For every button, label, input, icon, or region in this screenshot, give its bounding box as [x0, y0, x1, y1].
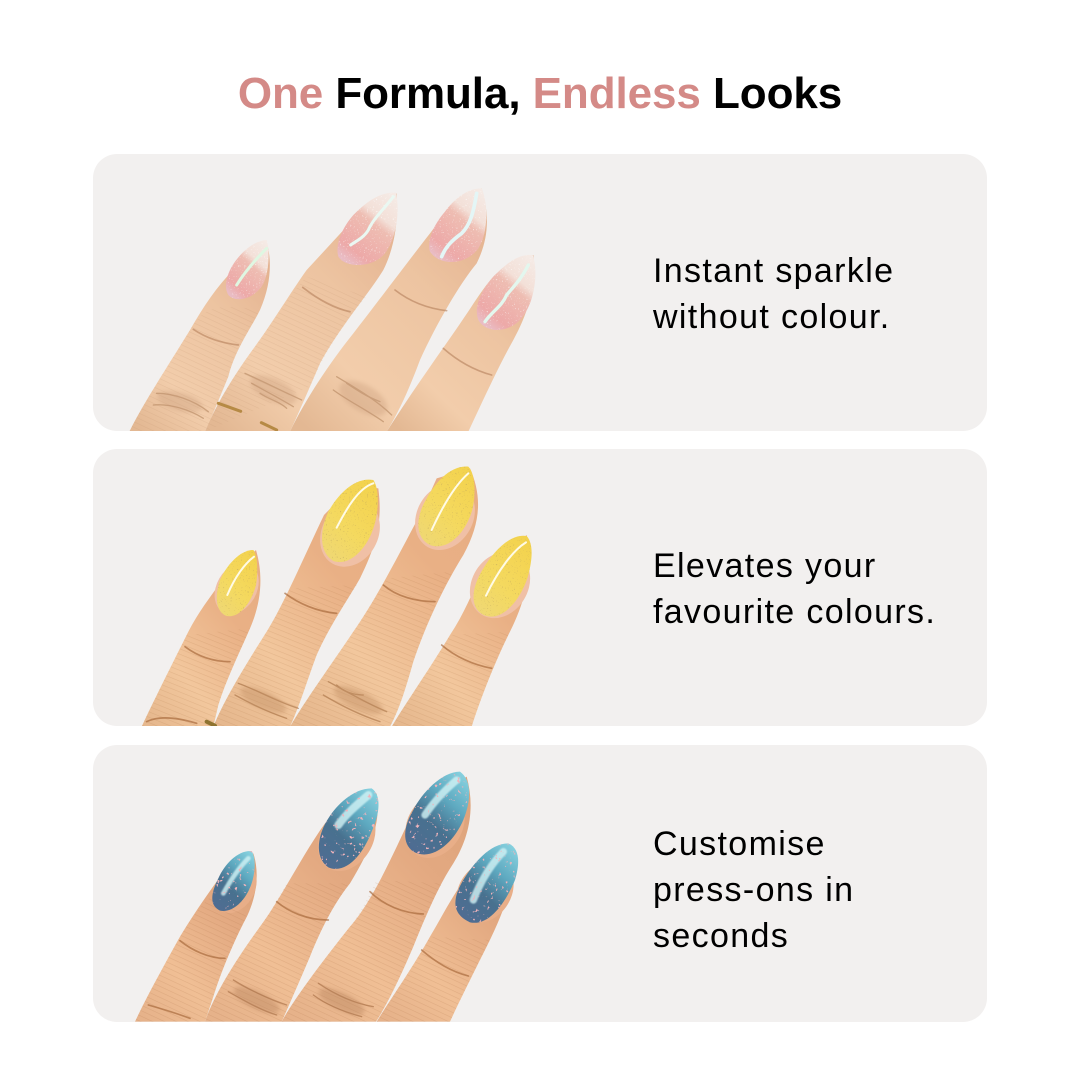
nail fold skin [204, 781, 525, 934]
caption: Customise [653, 825, 826, 863]
middle finger [213, 485, 380, 727]
caption: favourite colours. [653, 593, 936, 631]
ring finger [282, 777, 471, 1022]
pinky finger [135, 853, 257, 1022]
shimmer specks [217, 467, 532, 617]
title: One Formula, Endless Looks [238, 69, 842, 118]
fine skin wrinkles [135, 880, 490, 1022]
photo: hand with yellow shimmer nails [142, 466, 532, 726]
caption [653, 547, 936, 631]
pink flakes [212, 772, 518, 923]
index finger [392, 535, 529, 727]
pink mottling and sparkle [226, 188, 535, 330]
fine skin wrinkles [142, 572, 510, 727]
nail fold skin [206, 472, 542, 630]
caption [653, 252, 894, 336]
photo: hand with clear sparkle nails [130, 188, 536, 431]
caption: press-ons in [653, 871, 854, 909]
knuckle creases [235, 682, 387, 722]
index finger [387, 255, 534, 432]
chrome nails [212, 772, 518, 923]
panel: elevates colours [93, 449, 987, 726]
ring finger [290, 188, 487, 432]
glossy highlights [227, 473, 526, 596]
chrome highlights [223, 780, 503, 900]
knuckle shading [237, 680, 386, 720]
caption: without colour. [653, 298, 891, 336]
middle finger [205, 793, 378, 1022]
pinky finger [142, 550, 260, 727]
photo: hand with blue chrome nails [135, 772, 518, 1022]
fine skin wrinkles [129, 277, 367, 432]
panel: customise press-ons [93, 745, 987, 1022]
panel: instant sparkle [93, 154, 987, 431]
caption: seconds [653, 917, 789, 955]
caption: Instant sparkle [653, 252, 894, 290]
iridescent streaks [237, 193, 528, 322]
caption [653, 825, 854, 955]
knuckle shading [230, 982, 368, 1020]
gold ring [218, 403, 277, 430]
skin creases [147, 585, 492, 723]
knuckle creases [228, 980, 373, 1017]
ring finger [290, 468, 478, 727]
index finger [377, 847, 514, 1022]
clear nails [226, 188, 535, 330]
knuckle shading [155, 369, 393, 423]
skin creases [193, 287, 492, 375]
gold ring [207, 722, 215, 726]
yellow nails [217, 467, 532, 617]
caption: Elevates your [653, 547, 877, 585]
knuckle creases [153, 373, 392, 422]
middle finger [205, 193, 397, 432]
skin creases [148, 892, 468, 1018]
pinky finger [129, 242, 270, 432]
